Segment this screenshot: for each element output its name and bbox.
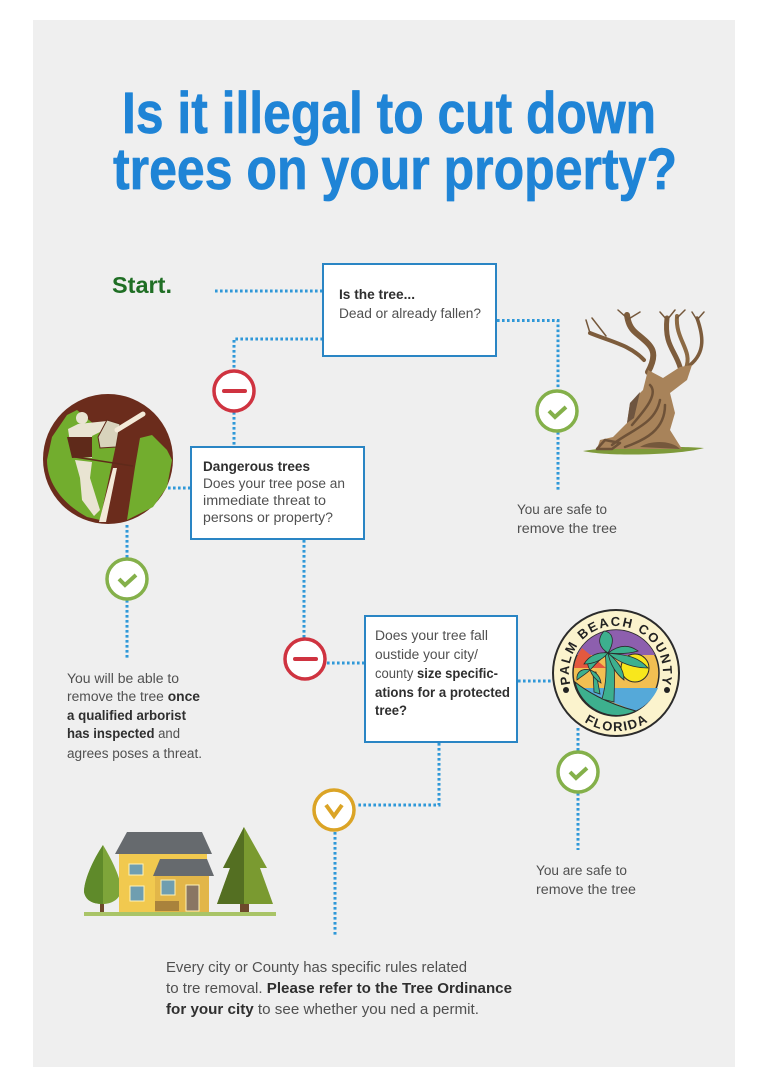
icon: minus 1 [214, 371, 254, 411]
icon: check 1 [537, 391, 577, 431]
text: safe to remove 2 [536, 863, 636, 897]
box: dangerous trees [191, 447, 364, 539]
box: dangerous trees: immediate threat to [203, 493, 326, 508]
box: size specifications: ations for a protected [375, 685, 510, 700]
dotted connectors [127, 291, 578, 935]
text: tree ordinance note: Every city or County has specific rules related [166, 960, 467, 976]
icon: check 2 [107, 559, 147, 599]
text: safe to remove 2: You are safe to [536, 863, 627, 878]
box: dangerous trees: Does your tree pose an [203, 476, 345, 491]
text: safe to remove 1: You are safe to [517, 502, 607, 517]
text: safe to remove 1 [517, 502, 617, 536]
icon: palm beach county seal [552, 609, 680, 737]
title: trees on your property? [113, 137, 677, 202]
icon: check 3 [558, 752, 598, 792]
box: dangerous trees: persons or property? [203, 510, 333, 525]
box: size specifications: county size specific- [375, 666, 498, 681]
box: is the tree [323, 264, 496, 356]
icon: house and trees [84, 827, 276, 916]
box: size specifications: Does your tree fall [375, 628, 488, 643]
icon: maybe [314, 790, 354, 830]
text: tree ordinance note [166, 960, 512, 1018]
start label: Start. [112, 272, 172, 298]
text: tree ordinance note: to tre removal. Please refer to the Tree Ordinance [166, 981, 512, 997]
text: safe to remove 2: remove the tree [536, 882, 636, 897]
text: arborist: You will be able to [67, 671, 179, 686]
text: arborist: remove the tree once [67, 689, 200, 704]
box: size specifications: tree? [375, 703, 407, 718]
icon: minus 2 [285, 639, 325, 679]
icon: arborist in tree [43, 394, 173, 524]
text: arborist: agrees poses a threat. [67, 746, 202, 761]
palm trees [577, 631, 648, 702]
text: safe to remove 1: remove the tree [517, 521, 617, 536]
text: tree ordinance note: for your city to see whether you ned a permit. [166, 1002, 479, 1018]
text: arborist [67, 671, 202, 761]
box: dangerous trees: Dangerous trees [203, 459, 310, 474]
title [113, 81, 677, 202]
box: size specifications [365, 616, 517, 742]
icon: dead tree [583, 310, 704, 455]
box: is the tree: Is the tree... [339, 287, 415, 302]
box: is the tree: Dead or already fallen? [339, 306, 481, 321]
box: size specifications: oustide your city/ [375, 647, 478, 662]
text: arborist: has inspected and [67, 726, 180, 741]
text: arborist: a qualified arborist [67, 708, 187, 723]
icon: palm beach county seal: PALM BEACH COUNTY [560, 616, 672, 686]
title: Is it illegal to cut down [122, 81, 656, 146]
icon: palm beach county seal: FLORIDA [585, 714, 648, 732]
